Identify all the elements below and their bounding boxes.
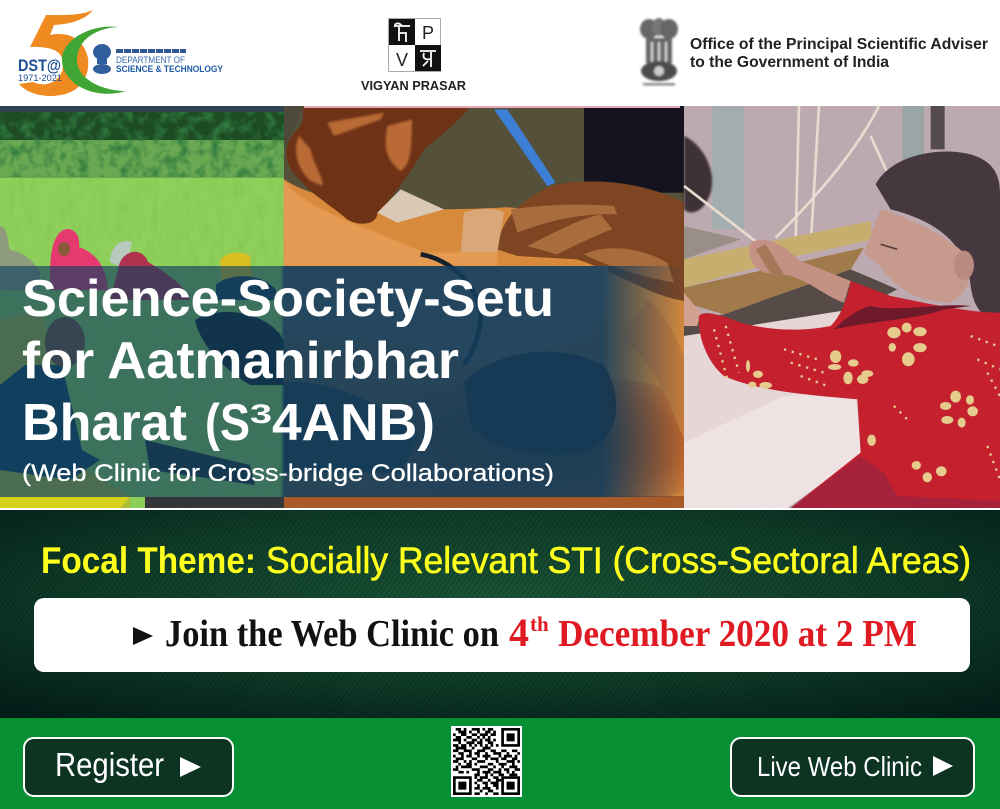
rule under photos <box>0 508 1000 510</box>
farm worker: white and maroon scarf <box>110 241 132 270</box>
icon: emblem small <box>93 44 111 74</box>
face and arm <box>864 209 970 303</box>
title <box>22 270 554 452</box>
logo: Vigyan Prasar <box>361 18 467 93</box>
logo: DST 50 years: DEPARTMENT OF <box>116 55 185 66</box>
title: (S <box>205 394 250 452</box>
footer band <box>0 718 1000 809</box>
title: Science-Society-Setu <box>22 270 554 328</box>
farm worker: left <box>0 226 40 290</box>
hair <box>876 151 1000 321</box>
panel: focal theme band <box>0 510 1000 718</box>
focal theme heading: Focal Theme: <box>41 540 256 581</box>
button: live web clinic <box>731 738 974 796</box>
date callout: 4 <box>509 610 529 655</box>
title: for Aatmanirbhar <box>22 332 459 390</box>
icon: national emblem <box>640 18 678 86</box>
date callout: th <box>530 612 549 636</box>
date callout <box>34 598 970 672</box>
QR finder: bottom left <box>453 776 472 795</box>
farm worker: foreground <box>0 310 130 508</box>
logo: PSA emblem and office name <box>640 18 988 86</box>
farm worker: yellow scarf <box>220 253 252 282</box>
QR finder: bottom right <box>501 776 520 795</box>
photo: potter's hands <box>284 106 734 513</box>
button: live web clinic: Live Web Clinic <box>757 751 922 782</box>
QR finder: top right <box>501 728 520 747</box>
logo: Vigyan Prasar: VIGYAN PRASAR <box>361 78 467 93</box>
QR code <box>451 726 522 797</box>
hand: lower right <box>497 181 684 301</box>
button: register: Register <box>55 746 164 783</box>
title: 4ANB) <box>272 394 435 452</box>
logo: PSA emblem and office name: to the Government of India <box>690 54 889 71</box>
logo: Vigyan Prasar: P <box>422 23 434 43</box>
logo: DST 50 years <box>18 10 224 96</box>
title: 3 <box>250 399 272 429</box>
bangle <box>421 254 481 364</box>
title: Bharat <box>22 394 187 452</box>
kurta flowers <box>746 323 978 482</box>
dark blue title overlay <box>0 266 684 497</box>
button: register <box>24 738 233 796</box>
date callout: December 2020 at 2 PM <box>558 613 917 655</box>
kurta dots <box>714 326 1000 479</box>
red kurta <box>699 281 1000 508</box>
subtitle: (Web Clinic for Cross-bridge Collaborations) <box>22 460 554 487</box>
photo: women in rice field <box>0 106 285 508</box>
farm worker: pink scarf <box>50 229 108 290</box>
logo: DST 50 years: SCIENCE & TECHNOLOGY <box>116 64 224 75</box>
date callout: Join the Web Clinic on <box>165 613 499 655</box>
focal theme heading: Socially Relevant STI (Cross-Sectoral Areas) <box>266 540 971 581</box>
icon: arrow <box>133 627 153 645</box>
logo: DST 50 years: 1971-2021 <box>18 73 62 84</box>
hand: upper <box>286 106 471 224</box>
white fabric <box>684 311 866 508</box>
loom <box>684 226 741 259</box>
logo: DST 50 years: DST@ <box>18 56 61 75</box>
pottery wheel <box>361 373 734 513</box>
header background <box>0 0 1000 106</box>
photo: girl at loom <box>684 106 1000 508</box>
logo: PSA emblem and office name: Office of the Principal Scientific Adviser <box>690 36 988 53</box>
logo: Vigyan Prasar: V <box>396 50 408 70</box>
